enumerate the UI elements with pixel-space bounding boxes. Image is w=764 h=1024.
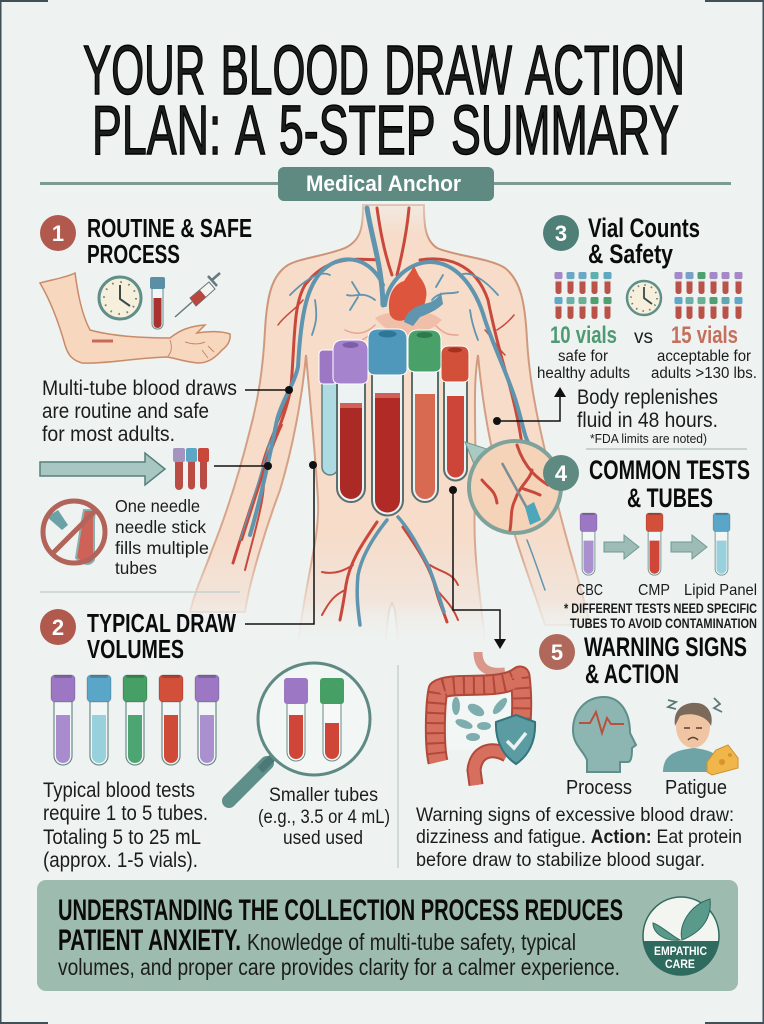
footer panel	[37, 880, 738, 991]
badge: empathic care: EMPATHIC	[654, 944, 707, 958]
test tube: green	[408, 330, 441, 502]
icon: cannula on arm	[92, 340, 113, 342]
text: multi-tube draws: are routine and safe	[42, 399, 209, 423]
text: warning signs	[416, 804, 742, 871]
arrow: leader to intestine	[449, 486, 506, 649]
badge 4	[543, 455, 579, 491]
icon labels: Process	[566, 777, 632, 799]
central anatomy illustration	[190, 205, 590, 645]
text: multi-tube draws: for most adults.	[42, 422, 175, 446]
icon labels: Patigue	[665, 777, 727, 799]
heading 5	[584, 632, 747, 689]
panel: step 2 typical draw volumes	[40, 461, 390, 872]
heading 4: & TUBES	[627, 483, 713, 513]
heart	[375, 266, 443, 335]
tube: CBC	[580, 513, 597, 575]
caption: safe for healthy adults: safe for	[558, 348, 608, 365]
badge 5	[539, 634, 575, 670]
heading 4	[589, 455, 750, 513]
heading 2: TYPICAL DRAW	[87, 608, 236, 638]
footer headline	[58, 894, 623, 957]
text: one needle: One needle	[115, 496, 200, 516]
badge 2: 2	[52, 615, 64, 640]
icon: intestine with shield	[435, 652, 535, 785]
badge 4: 4	[555, 461, 568, 486]
vials: fifteen	[674, 272, 742, 319]
note: different tests	[564, 600, 757, 631]
heading 1 second line: PROCESS	[87, 239, 180, 269]
text: body replenishes: Body replenishes	[577, 386, 718, 409]
badge 1: 1	[52, 221, 64, 246]
heading 3: Vial Counts	[588, 213, 700, 243]
arrow: to tubes	[40, 453, 165, 485]
caption: acceptable for adults: acceptable for	[657, 348, 751, 365]
panel: step 1 routine and safe process	[40, 213, 293, 578]
icon: vial	[150, 277, 165, 329]
text: smaller tubes: Smaller tubes	[269, 784, 378, 806]
text: typical blood tests: require 1 to 5 tubes.	[43, 801, 208, 825]
footer body	[58, 929, 620, 980]
footer body: volumes, and proper care provides clarity for a calmer experience.	[58, 954, 620, 980]
magnifier: needle in vein	[465, 441, 561, 533]
heading 3	[588, 213, 700, 269]
icon: syringe	[175, 273, 220, 317]
text: one needle: tubes	[115, 558, 157, 578]
text: typical blood tests: Totaling 5 to 25 mL	[43, 825, 201, 849]
five tubes	[51, 675, 219, 765]
body silhouette	[190, 205, 590, 645]
tube labels: Lipid Panel	[684, 582, 757, 599]
badge 2	[40, 609, 76, 645]
badge 3: 3	[555, 221, 567, 246]
badge: empathic care	[643, 897, 719, 975]
banner: medical anchor	[278, 167, 494, 201]
panel: step 3 vial counts and safety	[493, 213, 757, 446]
badge 3	[543, 215, 579, 251]
text: one needle	[115, 496, 209, 578]
text: multi-tube draws	[42, 376, 237, 446]
text: body replenishes	[577, 386, 718, 432]
arrow: leader up	[493, 387, 566, 425]
caption: safe for healthy adults	[537, 348, 630, 382]
icon labels	[566, 777, 727, 799]
banner: medical anchor: Medical Anchor	[306, 171, 461, 196]
caption: safe for healthy adults: healthy adults	[537, 365, 630, 382]
text: warning signs: before draw to stabilize blood sugar.	[416, 849, 705, 871]
tube labels	[576, 582, 757, 599]
caption: acceptable for adults	[651, 348, 757, 382]
text: typical blood tests: (approx. 1-5 vials).	[43, 848, 198, 872]
heading 3: & Safety	[588, 239, 673, 269]
heading 2	[87, 608, 236, 664]
test tube: large purple	[333, 340, 368, 502]
icon: forearm and hand	[40, 273, 230, 363]
red arteries	[233, 208, 522, 622]
text: body replenishes: fluid in 48 hours.	[577, 409, 718, 432]
leader line	[214, 462, 272, 470]
text: multi-tube draws: Multi-tube blood draws	[42, 376, 237, 400]
text: smaller tubes: (e.g., 3.5 or 4 mL)	[258, 806, 390, 828]
badge: empathic care: CARE	[665, 957, 695, 971]
text: one needle: needle stick	[115, 517, 206, 537]
heading 5: & ACTION	[585, 659, 679, 689]
note: FDA limits: *FDA limits are noted)	[590, 432, 707, 446]
text: smaller tubes	[258, 784, 390, 849]
icon: clock	[627, 281, 661, 315]
tube: CMP	[646, 513, 663, 575]
test tube: blue	[368, 329, 407, 516]
blue veins	[240, 208, 545, 625]
arrow	[671, 535, 707, 559]
leader line	[245, 461, 317, 624]
heading 2: VOLUMES	[87, 634, 184, 664]
vials: ten	[554, 272, 612, 319]
stat: 15 vials: 15 vials	[671, 322, 738, 349]
badge 5: 5	[551, 640, 563, 665]
heading 1: ROUTINE & SAFE	[87, 213, 252, 243]
panel: step 5 warning signs and action	[416, 632, 747, 871]
footer body: Knowledge of multi-tube safety, typical	[247, 929, 576, 955]
tube labels: CMP	[638, 582, 670, 599]
text: one needle: fills multiple	[115, 538, 209, 558]
leader line	[245, 386, 293, 394]
text: typical blood tests	[43, 778, 208, 872]
text: warning signs: dizziness and fatigue. Action: Eat protein	[416, 826, 742, 848]
arrow	[604, 535, 639, 559]
icon: head with pulse	[573, 697, 636, 772]
test tube: small purple behind	[319, 350, 338, 475]
panel: step 4 common tests and tubes	[543, 455, 757, 631]
test tube: red	[441, 346, 469, 480]
icon: three tubes	[173, 448, 209, 490]
text: smaller tubes: used used	[283, 827, 363, 849]
caption: acceptable for adults: adults >130 lbs.	[651, 365, 757, 382]
tube: lipid panel	[713, 513, 730, 575]
stat: 10 vials: 10 vials	[550, 322, 617, 349]
icon: no repeated needles	[43, 501, 105, 564]
text: warning signs: Warning signs of excessive blood draw:	[416, 804, 734, 826]
footer headline: PATIENT ANXIETY.	[58, 924, 241, 957]
text: typical blood tests: Typical blood tests	[43, 778, 195, 802]
magnifier: smaller tubes	[229, 663, 370, 801]
title	[83, 31, 685, 169]
icon: clock	[99, 277, 141, 319]
badge 1	[40, 215, 76, 251]
versus: vs	[634, 327, 653, 348]
icon: tired person with cheese	[663, 698, 738, 775]
tube labels: CBC	[576, 582, 603, 599]
